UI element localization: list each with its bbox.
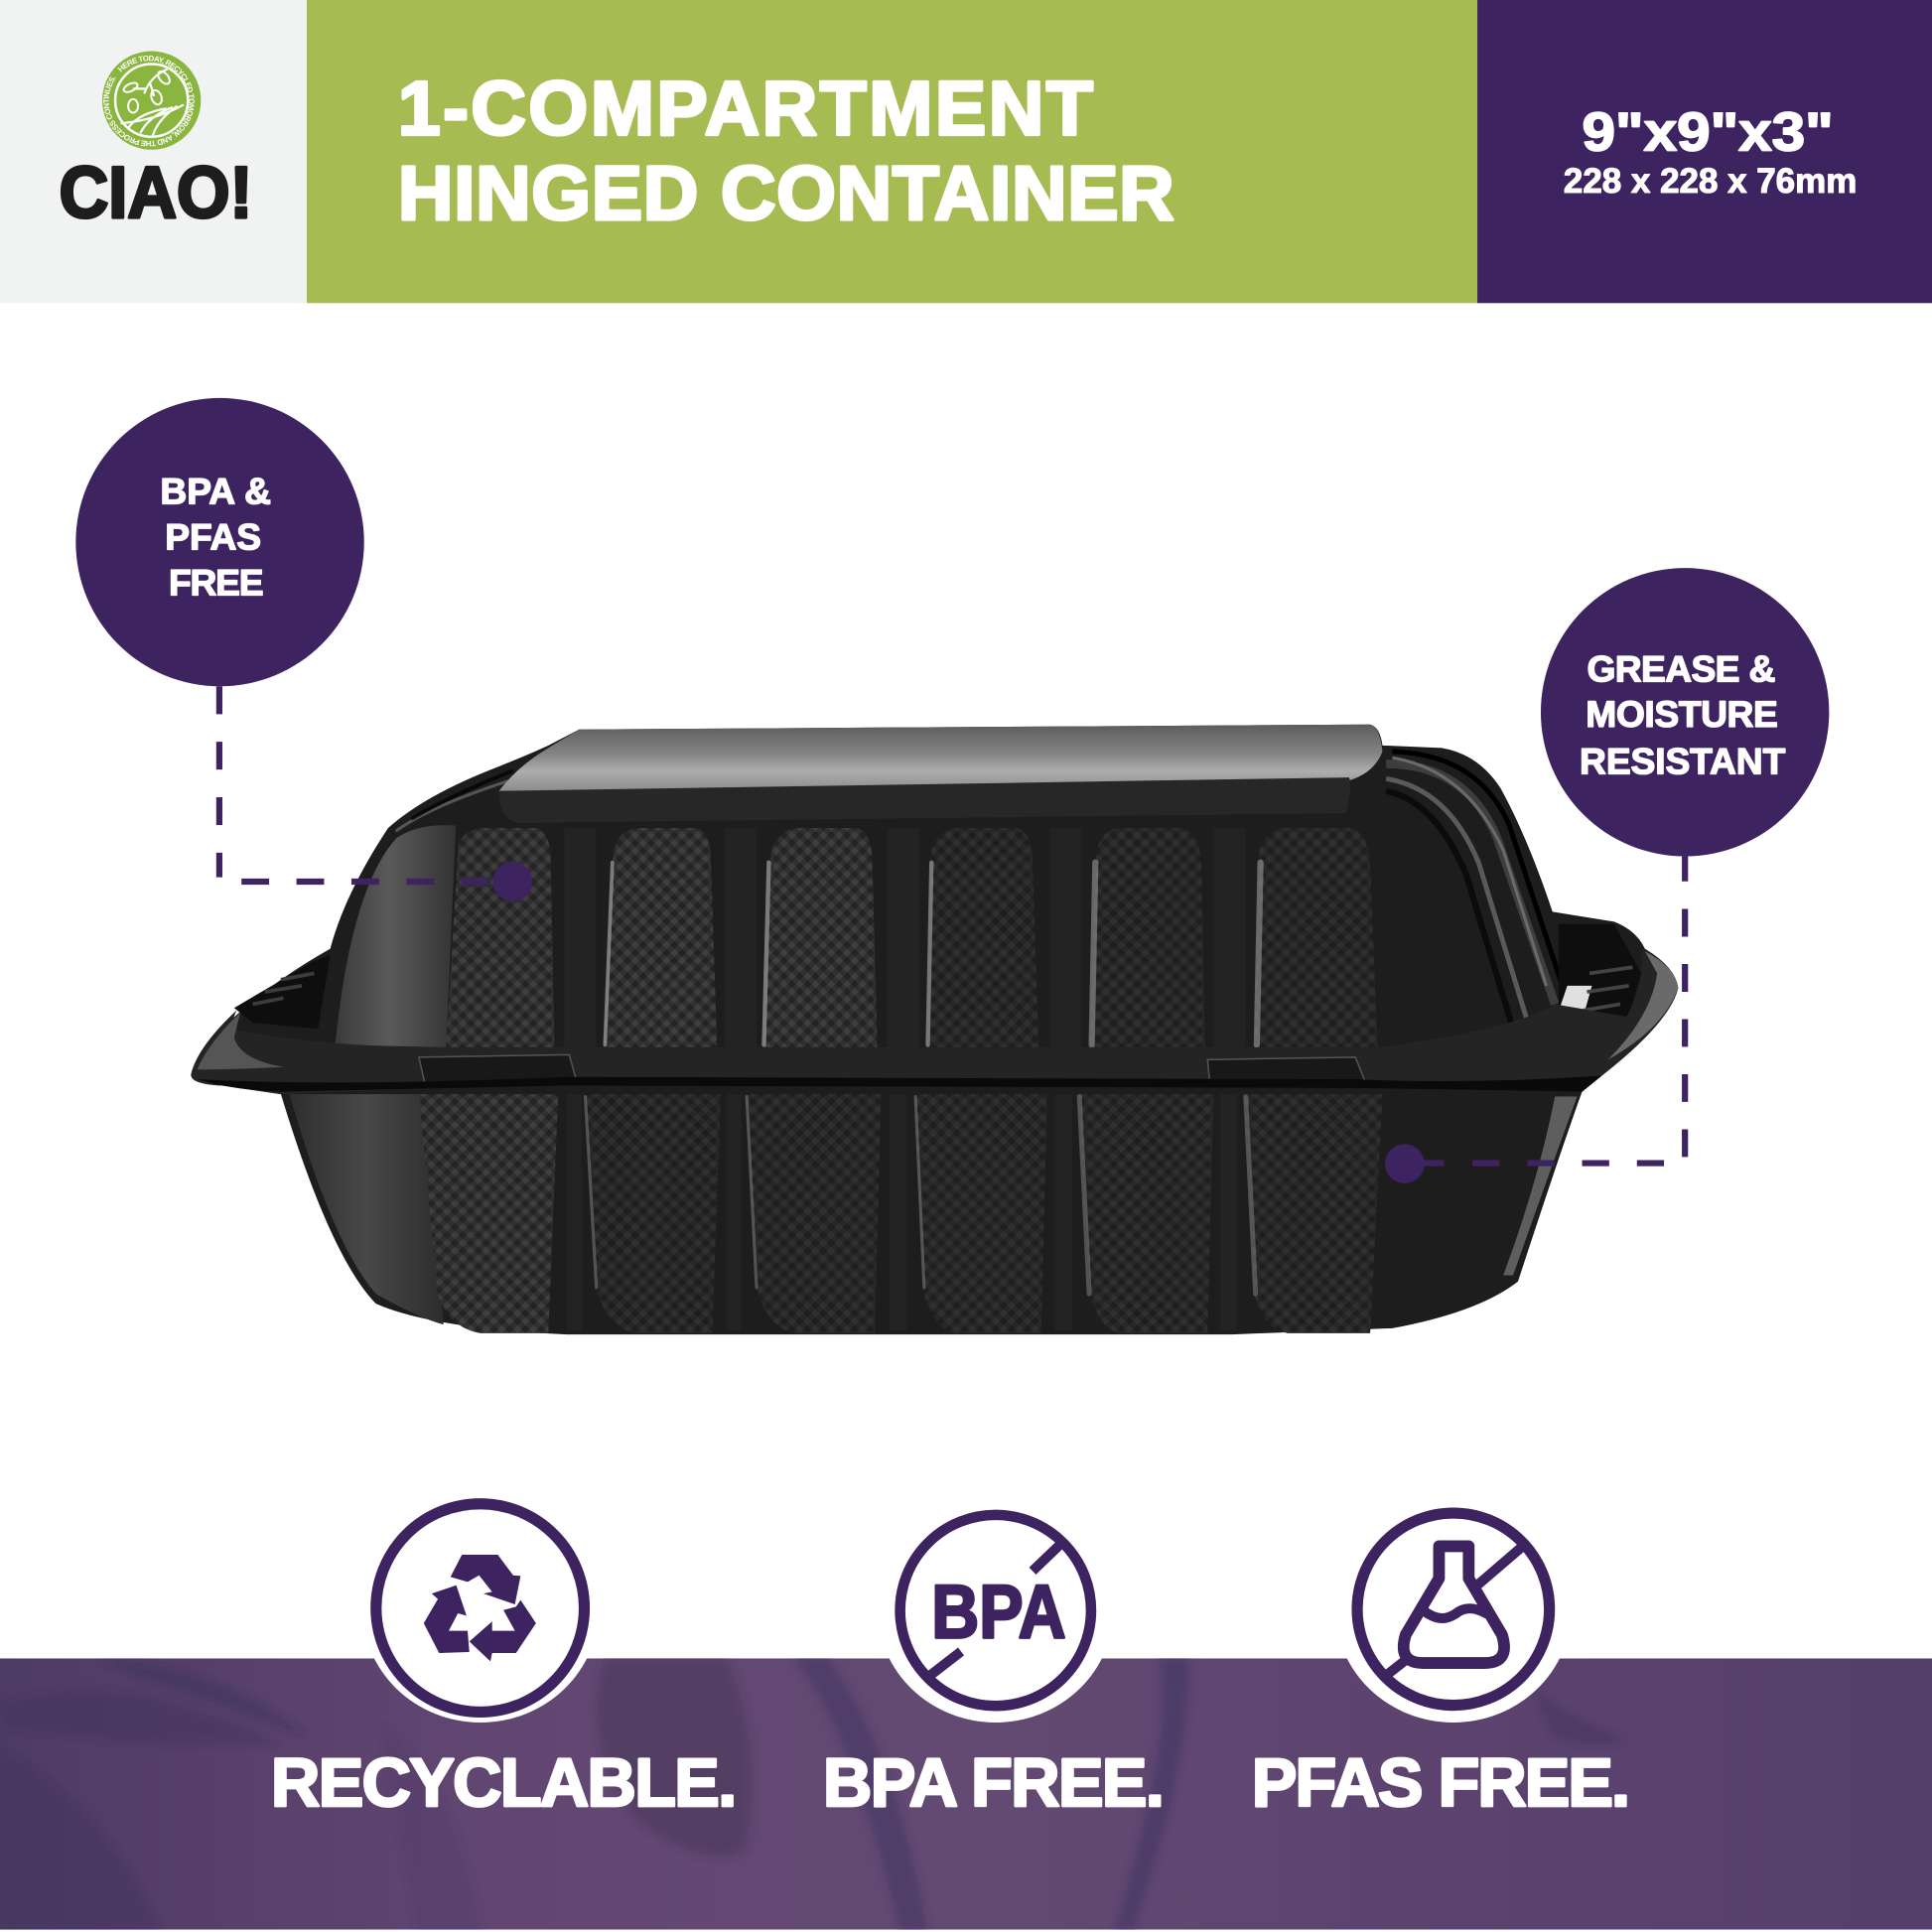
lower right edge — [1503, 1097, 1578, 1276]
lower left side panel — [290, 1094, 444, 1324]
leader line — [219, 686, 499, 882]
product photo: black hinged container — [191, 725, 1678, 1334]
callout dot — [492, 862, 532, 901]
left clasp — [419, 1054, 577, 1084]
right flange teeth — [1559, 924, 1641, 1047]
label: recyclable: RECYCLABLE. — [271, 1745, 737, 1821]
right clasp — [1207, 1057, 1365, 1084]
badge: PFAS free — [1335, 1494, 1572, 1723]
callout: grease and moisture resistant — [1385, 568, 1829, 1183]
panel gap shading — [564, 828, 1246, 1330]
callout text: PFAS — [165, 516, 261, 558]
callout circle — [1541, 568, 1829, 857]
title panel — [307, 0, 1477, 303]
leaf shadows — [0, 1658, 1626, 1930]
left flange teeth — [234, 955, 331, 1029]
lid ribs left — [397, 771, 511, 830]
lid plate rim — [499, 777, 1350, 823]
size panel — [1477, 0, 1932, 303]
label: BPA free: BPA FREE. — [823, 1745, 1165, 1821]
header band — [0, 0, 1932, 304]
badge: recyclable — [362, 1494, 599, 1723]
icon: flask crossed out — [1384, 1546, 1524, 1677]
lid top plate — [499, 725, 1382, 791]
icon: BPA crossed out: BPA — [931, 1570, 1066, 1654]
callout: BPA and PFAS free — [75, 398, 532, 901]
container rim — [191, 949, 1678, 1094]
callout text — [160, 471, 271, 603]
callout text: BPA & — [160, 471, 271, 512]
badge: BPA free — [878, 1494, 1114, 1723]
icon: BPA crossed out — [926, 1543, 1066, 1678]
title line 1: 1-COMPARTMENT — [398, 66, 1093, 151]
title line 2: HINGED CONTAINER — [398, 151, 1174, 236]
icon: round green logo badge: HERE TODAY, RECYCLED TOMORROW, AND THE PROCESS CONTINUES. — [103, 56, 195, 147]
badge halo — [362, 1494, 599, 1723]
rim highlight — [198, 1013, 283, 1069]
callout text: GREASE & — [1587, 647, 1775, 689]
callout circle — [75, 398, 364, 686]
callout dot — [1385, 1144, 1425, 1183]
lower rib highlights — [586, 1097, 1256, 1294]
brand name: CIAO! — [60, 152, 252, 233]
logo panel — [0, 0, 307, 304]
badge ring — [376, 1504, 585, 1712]
size in millimetres: 228 x 228 x 76mm — [1564, 163, 1857, 201]
badge ring — [900, 1515, 1091, 1706]
rim lower shadow — [198, 1075, 1601, 1092]
label: PFAS free: PFAS FREE. — [1252, 1745, 1630, 1821]
callout text: MOISTURE — [1586, 693, 1778, 735]
callout text: FREE — [169, 561, 264, 603]
badge halo — [1335, 1494, 1572, 1723]
callout text: RESISTANT — [1580, 740, 1786, 781]
lid left side panel — [336, 825, 456, 1047]
size in inches: 9"x9"x3" — [1583, 101, 1834, 162]
upper rib panels — [446, 828, 1378, 1047]
lower rib panels — [419, 1094, 1382, 1333]
badge halo — [878, 1494, 1114, 1723]
badge ring — [1357, 1513, 1550, 1706]
icon: recycling arrows — [424, 1555, 536, 1661]
container silhouette — [191, 725, 1678, 1334]
lid right ribs — [1386, 752, 1563, 1029]
rim shine right — [1608, 951, 1678, 1059]
callout text — [1580, 647, 1786, 781]
leader line — [1422, 857, 1685, 1164]
upper rib highlights — [605, 863, 1261, 1044]
bottom band with leaves — [0, 1658, 1932, 1930]
